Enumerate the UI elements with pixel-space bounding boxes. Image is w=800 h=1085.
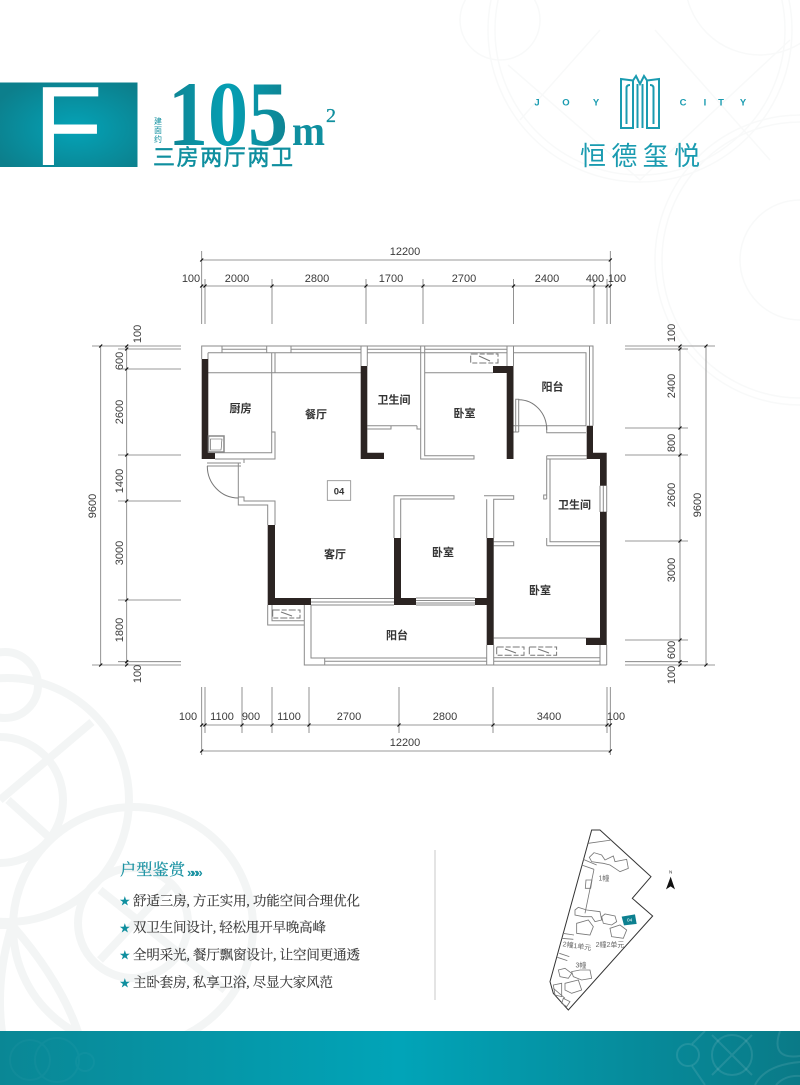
site plan: 2幢2单元	[596, 940, 624, 949]
dimensions: bottom	[179, 687, 625, 755]
dimensions: right: 9600	[692, 493, 704, 517]
floor plan: 客厅	[324, 547, 346, 561]
logo: Joy City: O	[562, 98, 570, 108]
dimensions: left: 1800	[114, 618, 126, 642]
label: built area: 建	[154, 116, 162, 126]
dimensions: top	[182, 246, 626, 324]
divider	[434, 850, 436, 1000]
logo: Joy City: I	[704, 98, 706, 108]
heading chevrons: »»»	[187, 865, 202, 880]
dimensions: left: 100	[132, 665, 144, 683]
dimensions: right: 600	[666, 641, 678, 659]
area number: 105	[168, 63, 288, 165]
bullet 1: 舒适三房, 方正实用, 功能空间合理优化	[133, 892, 360, 908]
bullet 4: 主卧套房, 私享卫浴, 尽显大家风范	[133, 974, 333, 990]
floor plan: 卧室	[454, 406, 476, 420]
layout name: 三房两厅两卫	[153, 145, 293, 170]
logo text right: C	[680, 98, 687, 108]
floor plan: 卧室	[529, 583, 551, 597]
site plan: 2幢1单元	[562, 939, 592, 952]
solid walls	[202, 359, 607, 645]
dimensions: bottom: 3400	[537, 711, 561, 723]
unit tag	[622, 914, 637, 925]
dimensions: right: 2600	[666, 483, 678, 507]
bullet 4: ★	[119, 976, 131, 992]
logo mark	[621, 76, 659, 128]
dimensions: top: 12200	[390, 246, 420, 258]
dimensions: left: 9600	[87, 494, 99, 518]
dimensions: right: 100	[666, 324, 678, 342]
site plan	[550, 830, 675, 1010]
bullet 2: 双卫生间设计, 轻松甩开早晚高峰	[133, 919, 326, 935]
air conditioner units	[273, 354, 557, 655]
logo: Joy City: Y	[593, 98, 600, 108]
unit: m	[292, 109, 325, 155]
dimensions: bottom: 1100	[210, 711, 234, 723]
room labels: 厨房	[230, 401, 252, 415]
unit tag: 04	[627, 917, 633, 922]
superscript: 2	[326, 105, 336, 127]
bullet 1: ★	[119, 894, 131, 910]
dimensions: left: 3000	[114, 541, 126, 565]
dimensions: right: 2400	[666, 374, 678, 398]
dimensions: top: 2000	[225, 273, 249, 285]
dimensions: left: 1400	[114, 469, 126, 493]
header badge: F: F	[34, 64, 102, 189]
logo: Joy City	[534, 76, 747, 171]
dimensions: left: 2600	[114, 400, 126, 424]
dimensions: right	[625, 324, 715, 684]
dimensions: top: 100	[608, 273, 626, 285]
site inner lines and buildings	[553, 840, 628, 1007]
band pattern	[10, 1031, 800, 1085]
dimensions: bottom: 100	[179, 711, 197, 723]
dimensions: top: 2400	[535, 273, 559, 285]
logo Chinese name: 恒德玺悦	[580, 141, 700, 171]
floor plan: 卫生间	[558, 498, 591, 512]
background pattern: bottom left	[0, 652, 253, 1085]
kitchen flue	[208, 436, 224, 452]
label: built area: 面	[154, 126, 162, 135]
header badge: F	[0, 64, 138, 189]
unit number: 04	[334, 486, 345, 498]
thin walls and windows	[202, 346, 607, 665]
bullet 3: 全明采光, 餐厅飘窗设计, 让空间更通透	[133, 946, 360, 962]
site labels: 1幢	[599, 874, 609, 883]
floor plan: 餐厅	[305, 407, 327, 421]
dimensions: left: 600	[114, 352, 126, 370]
dimensions: bottom: 1100	[277, 711, 301, 723]
north arrow	[666, 869, 675, 889]
dimensions: right: 3000	[666, 558, 678, 582]
bullet 3: ★	[119, 948, 131, 964]
background pattern: top right	[460, 0, 800, 405]
dimensions: right: 800	[666, 434, 678, 452]
dimensions: top: 1700	[379, 273, 403, 285]
floor plan: 卫生间	[378, 392, 410, 406]
dimensions: left	[87, 325, 181, 683]
site plan: 3幢	[576, 960, 586, 969]
dimensions: bottom: 2700	[337, 711, 361, 723]
floor plan: 卧室	[432, 545, 454, 559]
dimensions: bottom: 900	[242, 711, 260, 723]
north arrow: N	[669, 869, 672, 874]
dimensions: left: 100	[132, 325, 144, 343]
heading: 户型鉴赏	[120, 861, 186, 879]
bullet 2: ★	[119, 922, 131, 936]
site boundary	[550, 830, 653, 1010]
dimensions: top: 2700	[452, 273, 476, 285]
panel: layout highlights	[119, 861, 360, 992]
doors	[207, 400, 547, 498]
dimensions: top: 2800	[305, 273, 329, 285]
bottom band	[0, 1031, 800, 1085]
unit number	[327, 481, 351, 500]
floor plan: 阳台	[542, 380, 564, 394]
dimensions: bottom: 100	[607, 711, 625, 723]
dimensions: right: 100	[666, 666, 678, 684]
dimensions: top: 100	[182, 273, 200, 285]
label: built area: 约	[154, 134, 162, 144]
floor plan	[202, 346, 607, 665]
logo: Joy City: Y	[740, 98, 747, 108]
dimensions: bottom: 2800	[433, 711, 457, 723]
logo text left: J	[534, 98, 540, 108]
header: area	[153, 63, 336, 170]
dimensions: bottom: 12200	[390, 737, 420, 749]
logo: Joy City: T	[718, 98, 724, 108]
dimensions: top: 400	[586, 273, 604, 285]
floor plan: 阳台	[386, 628, 408, 642]
